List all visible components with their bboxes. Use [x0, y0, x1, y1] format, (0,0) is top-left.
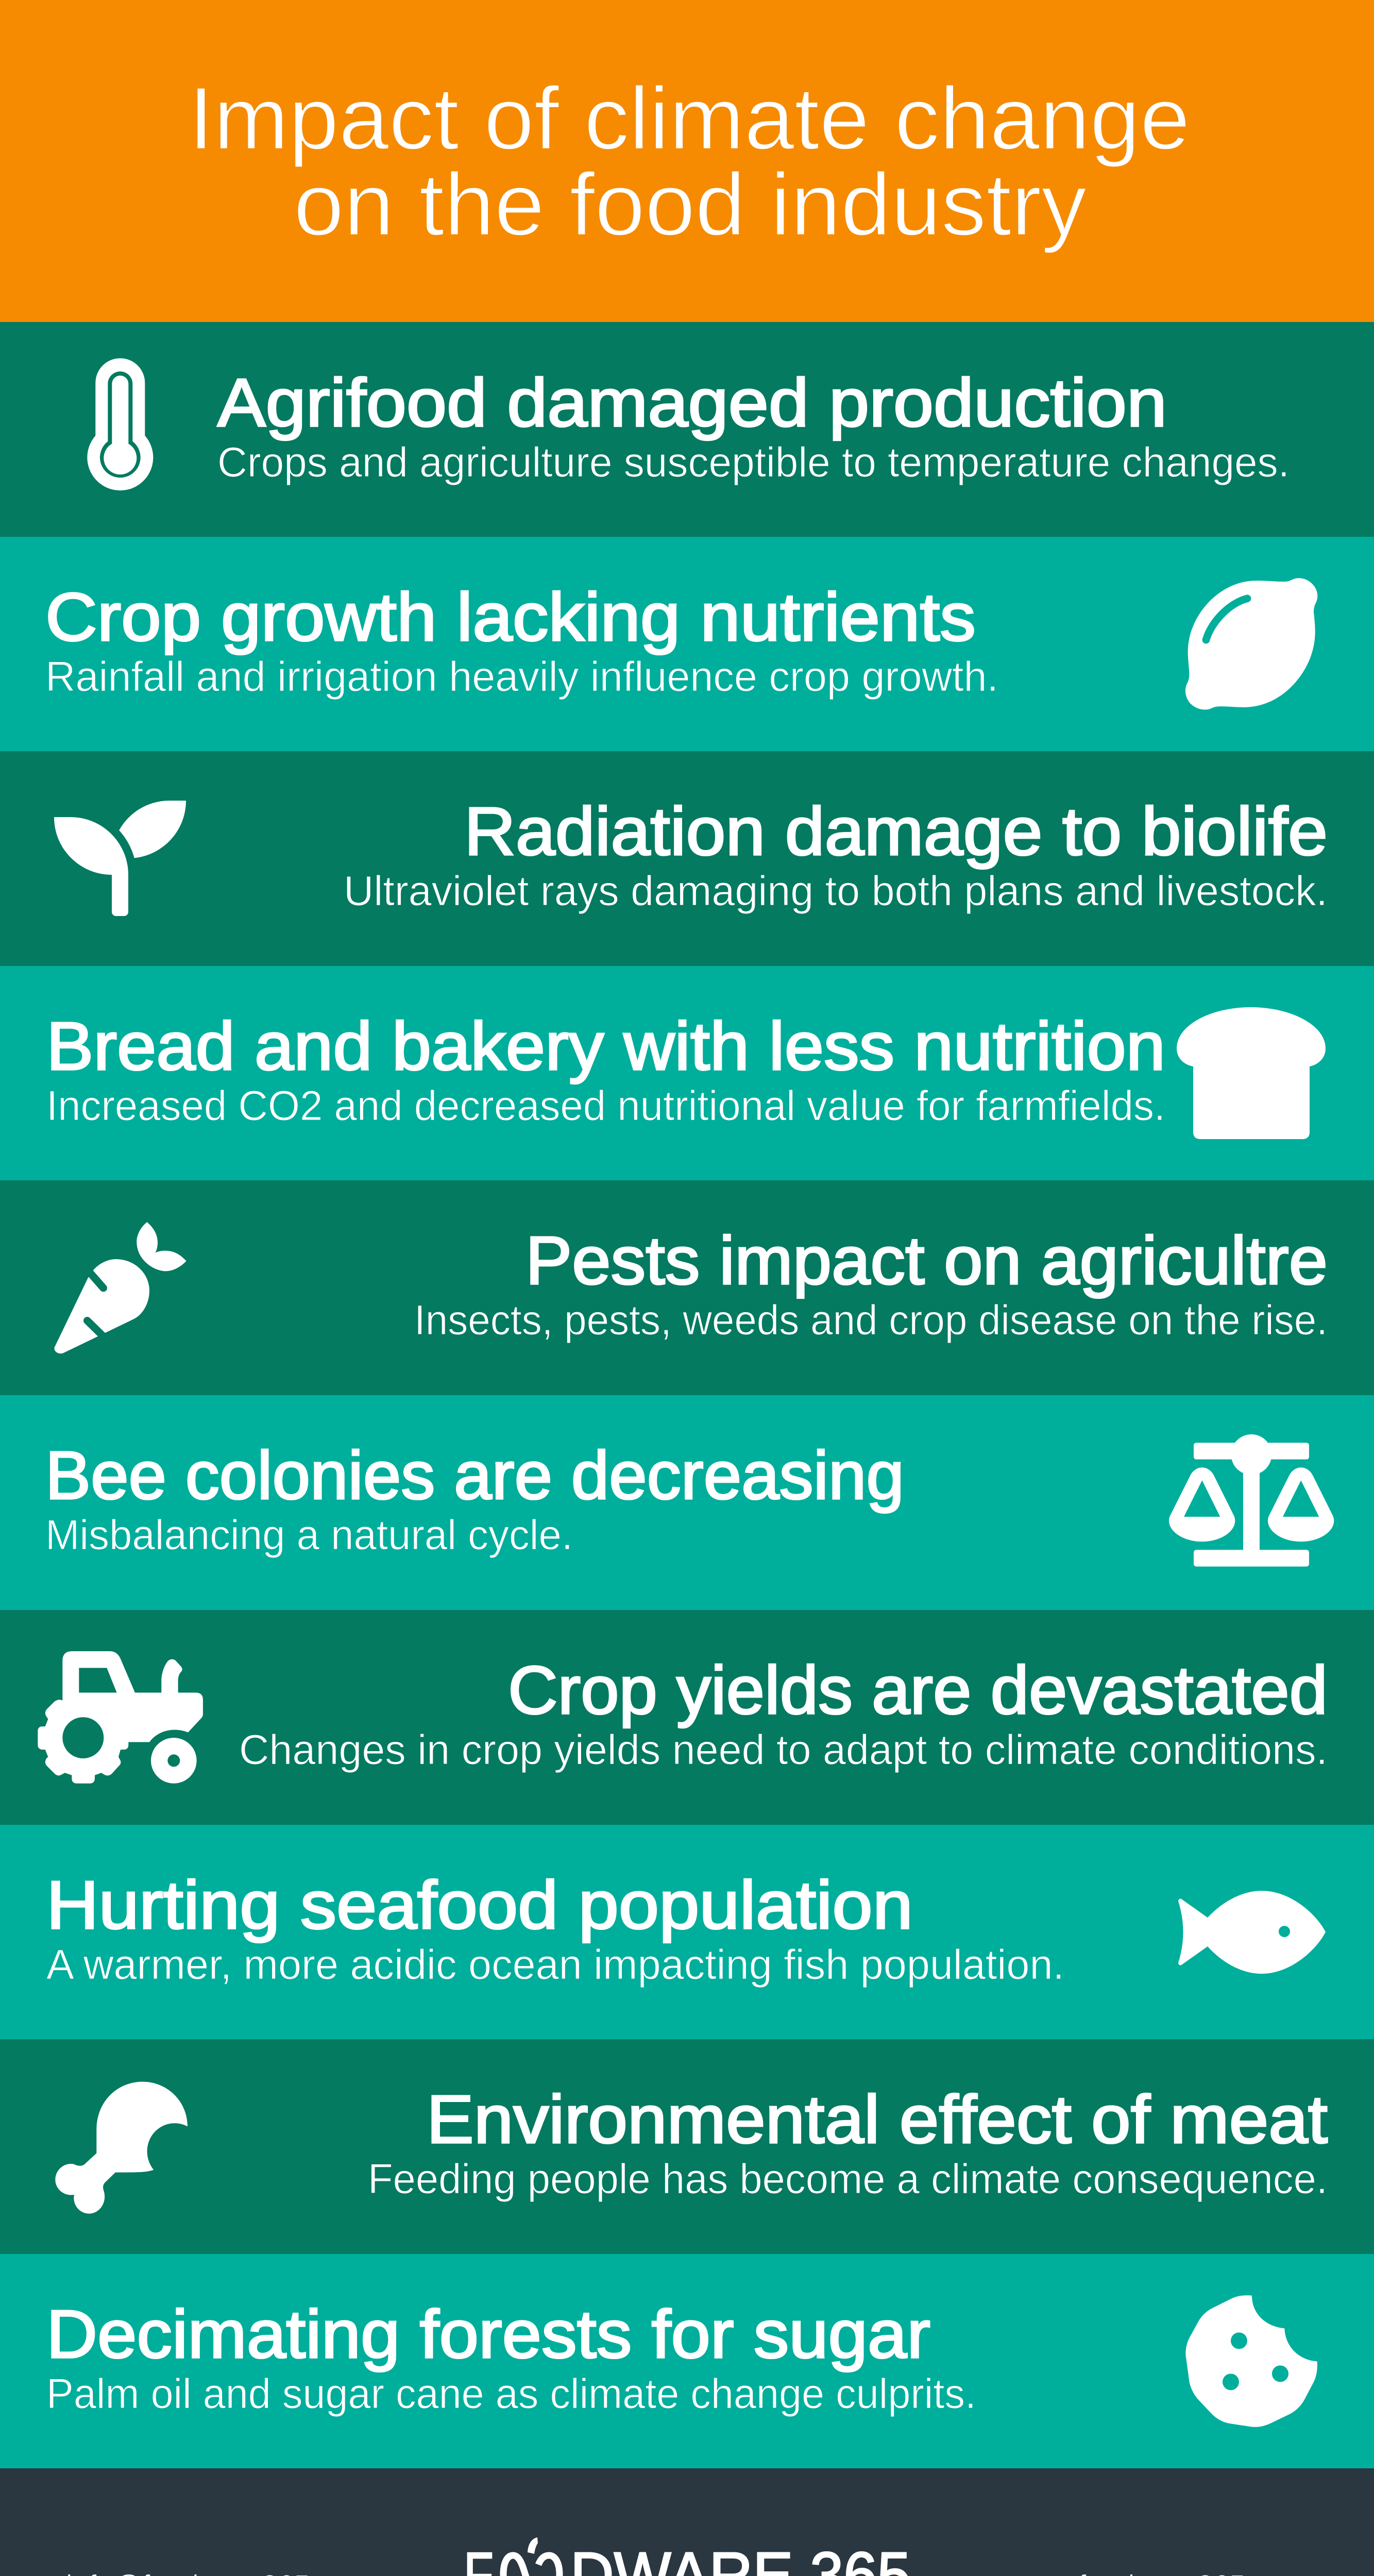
- title: [189, 69, 1190, 254]
- icon: tractor: [38, 1651, 203, 1784]
- heading: Environmental effect of meat: [427, 2081, 1328, 2157]
- title banner: [0, 0, 1374, 322]
- icon: thermometer: [87, 358, 153, 490]
- title: on the food industry: [294, 155, 1087, 254]
- panel: agrifood damaged production: [0, 322, 1374, 537]
- icon: carrot: [54, 1222, 186, 1353]
- heading: Radiation damage to biolife: [464, 793, 1328, 869]
- description: Ultraviolet rays damaging to both plans and livestock.: [344, 868, 1328, 914]
- title: Impact of climate change: [189, 69, 1190, 168]
- description: Changes in crop yields need to adapt to climate conditions.: [239, 1726, 1328, 1773]
- description: Feeding people has become a climate consequence.: [368, 2156, 1328, 2202]
- heading: Pests impact on agricultre: [525, 1223, 1328, 1298]
- icon: lemon: [1185, 578, 1317, 709]
- description: Insects, pests, weeds and crop disease on the rise.: [414, 1297, 1328, 1344]
- description: A warmer, more acidic ocean impacting fish population.: [46, 1941, 1064, 1988]
- panel: footer: [0, 2468, 1374, 2576]
- description: Increased CO2 and decreased nutritional value for farmfields.: [46, 1082, 1165, 1129]
- icon: seedling: [54, 801, 186, 916]
- description: Rainfall and irrigation heavily influence crop growth.: [45, 653, 998, 700]
- logo: Foodware 365: [464, 2537, 911, 2576]
- description: Misbalancing a natural cycle.: [45, 1512, 573, 1558]
- panel: radiation damage to biolife: [0, 751, 1374, 966]
- panel: pests impact on agriculture: [0, 1180, 1374, 1395]
- heading: Crop yields are devastated: [508, 1652, 1328, 1728]
- heading: Decimating forests for sugar: [46, 2296, 930, 2372]
- icon: cookie: [1185, 2295, 1317, 2427]
- icon: bread: [1177, 1007, 1326, 1139]
- panel: environmental effect of meat: [0, 2039, 1374, 2254]
- icon: drumstick: [55, 2082, 188, 2214]
- description: Palm oil and sugar cane as climate change culprits.: [46, 2370, 976, 2417]
- icon: balance scale: [1169, 1434, 1334, 1567]
- description: Crops and agriculture susceptible to temperature changes.: [217, 439, 1290, 486]
- heading: Hurting seafood population: [46, 1867, 913, 1943]
- panel: bee colonies are decreasing: [0, 1395, 1374, 1610]
- panel: bread and bakery with less nutrition: [0, 966, 1374, 1180]
- panel: hurting seafood population: [0, 1825, 1374, 2039]
- panel: crop yields are devastated: [0, 1610, 1374, 1825]
- heading: Bee colonies are decreasing: [45, 1437, 904, 1513]
- heading: Agrifood damaged production: [217, 365, 1167, 440]
- panel: crop growth lacking nutrients: [0, 537, 1374, 751]
- panel: decimating forests for sugar: [0, 2254, 1374, 2468]
- heading: Crop growth lacking nutrients: [45, 579, 976, 655]
- heading: Bread and bakery with less nutrition: [46, 1008, 1165, 1084]
- icon: fish: [1178, 1891, 1326, 1974]
